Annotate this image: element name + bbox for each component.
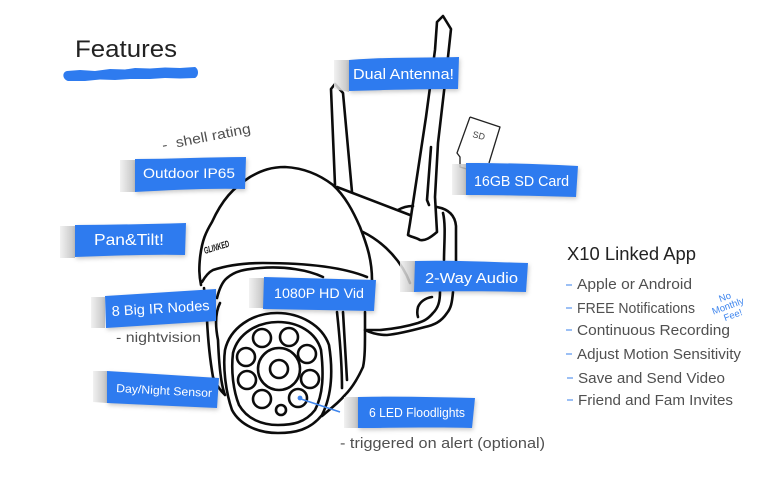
list item: FREE Notifications: FREE Notifications xyxy=(577,301,695,317)
icon: lens plate xyxy=(232,322,323,425)
list item: Continuous Recording: Continuous Recording xyxy=(577,323,730,339)
app heading: X10 Linked App xyxy=(567,244,696,264)
brand mark on dome: GLINKED xyxy=(203,239,231,257)
note: shell rating: - shell rating xyxy=(161,120,252,153)
icon: IR and LED nodes xyxy=(237,328,319,415)
label: Outdoor IP65: Outdoor IP65 xyxy=(143,165,235,181)
icon: SD card xyxy=(457,117,500,170)
label: Day/Night Sensor xyxy=(93,371,219,408)
label: 6 LED Floodlights: 6 LED Floodlights xyxy=(369,405,465,420)
list item: Save and Send Video: Save and Send Video xyxy=(578,371,725,387)
icon: dome rim xyxy=(202,263,367,282)
icon: main antenna xyxy=(408,16,451,240)
pointer: LED floodlight xyxy=(298,396,340,412)
icon: camera arm and rear housing xyxy=(337,187,456,283)
label: 1080P HD Vid: 1080P HD Vid xyxy=(274,285,364,301)
icon: SD card: SD xyxy=(472,129,487,142)
label: 16GB SD Card xyxy=(452,163,578,197)
label: Outdoor IP65 xyxy=(120,157,246,192)
list item: Adjust Motion Sensitivity: Adjust Motion Sensitivity xyxy=(577,347,742,363)
label: Dual Antenna xyxy=(334,57,459,92)
note: triggered on alert: - triggered on alert (optional) xyxy=(340,435,545,452)
note: nightvision: - nightvision xyxy=(116,329,201,345)
callout: No Monthly Fee: Monthly xyxy=(711,296,746,318)
label: 8 Big IR Nodes xyxy=(91,289,216,328)
icon: camera dome xyxy=(199,167,372,285)
label: 16GB SD Card: 16GB SD Card xyxy=(474,174,569,190)
callout: No Monthly Fee: Fee! xyxy=(722,307,744,324)
panel: X10 Linked App xyxy=(566,244,742,409)
label: 8 Big IR Nodes: 8 Big IR Nodes xyxy=(111,297,210,319)
list item dashes xyxy=(566,285,573,400)
brush underline xyxy=(63,67,198,81)
label: 2-Way Audio xyxy=(400,261,528,292)
icon: rear antenna xyxy=(331,84,352,192)
label: Pan and Tilt xyxy=(60,223,186,258)
heading: Features: Features xyxy=(75,36,177,63)
label: Dual Antenna: Dual Antenna! xyxy=(353,67,454,83)
label: 2-Way Audio: 2-Way Audio xyxy=(425,271,518,287)
icon: lower rear housing xyxy=(365,292,453,335)
icon: inner hood xyxy=(204,267,365,416)
label: 1080P HD Vid xyxy=(249,277,376,311)
callout: No Monthly Fee: No xyxy=(718,290,733,305)
list item: Friend and Fam Invites: Friend and Fam Invites xyxy=(578,393,733,409)
camera line drawing xyxy=(199,16,456,433)
icon: lens housing xyxy=(224,313,331,433)
list item: Apple or Android: Apple or Android xyxy=(577,277,692,293)
label: Pan and Tilt: Pan&Tilt! xyxy=(94,232,164,249)
label: 6 LED Floodlights xyxy=(344,397,475,428)
label: Day/Night Sensor: Day/Night Sensor xyxy=(116,383,213,400)
callout: No Monthly Fee xyxy=(711,290,746,324)
